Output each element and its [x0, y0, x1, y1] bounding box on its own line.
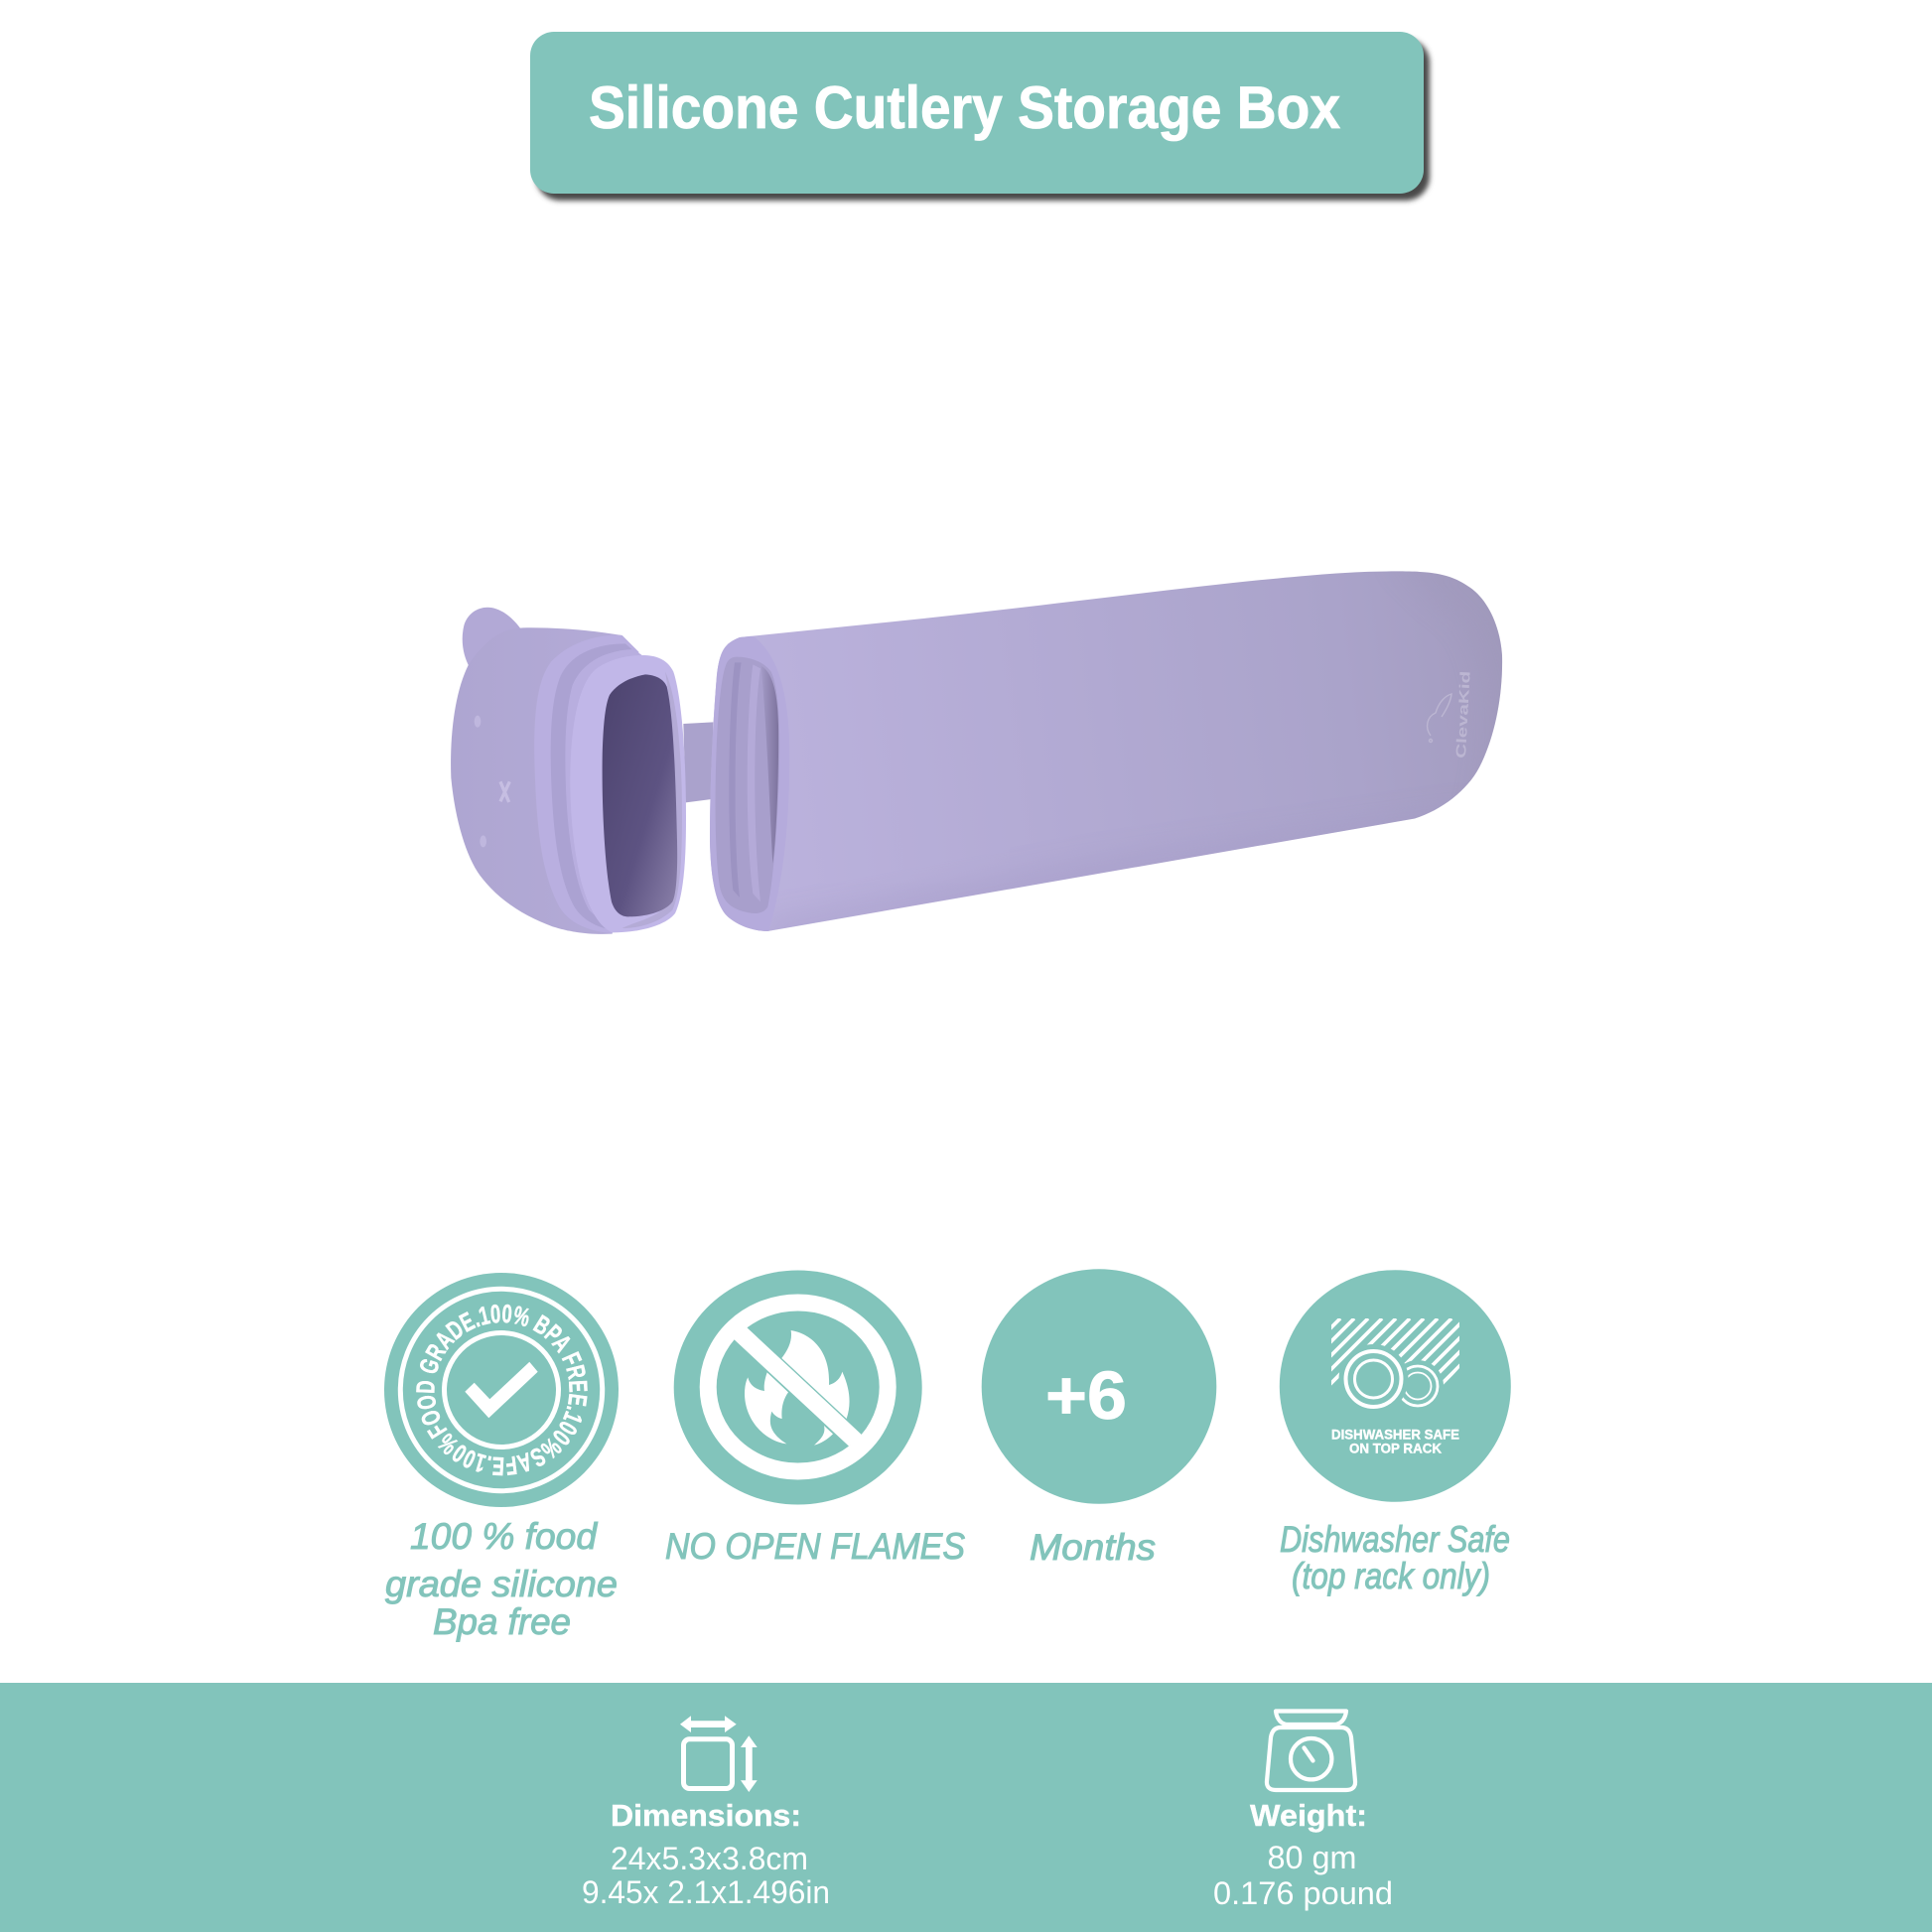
label: food grade: Bpa free: [433, 1601, 571, 1642]
icon: dimensions: [680, 1716, 758, 1792]
weight text: [1213, 1798, 1393, 1911]
cap head: [451, 627, 638, 934]
connecting strap: [683, 722, 713, 802]
bear cap: [451, 608, 686, 934]
product photo: silicone cutlery case with bear cap: [451, 556, 1529, 943]
dimensions text: [582, 1798, 830, 1910]
cap opening: [603, 674, 677, 916]
cap face details: [475, 716, 509, 847]
badge: 100% food grade: [384, 1273, 619, 1507]
badge caption: ON TOP RACK: [1349, 1442, 1442, 1455]
icon: kitchen scale: [1267, 1712, 1355, 1790]
badge: dishwasher safe: [1271, 1270, 1521, 1502]
brand logo on case: [1428, 670, 1473, 759]
inner rim: [570, 655, 686, 932]
title text: Silicone Cutlery Storage Box: [589, 74, 1340, 141]
label: dishwasher safe: (top rack only): [1292, 1556, 1490, 1596]
icon: flame with prohibition slash: [732, 1325, 865, 1447]
dimensions text: 24x5.3x3.8cm: [611, 1841, 808, 1876]
label: months: Months: [1030, 1527, 1156, 1568]
case body: [710, 571, 1503, 931]
badge caption: DISHWASHER SAFE: [1331, 1428, 1459, 1442]
badge: no open flames: [674, 1271, 922, 1505]
age number: +6: [1045, 1357, 1127, 1434]
label: no open flames: NO OPEN FLAMES: [665, 1526, 965, 1567]
footer band: [0, 1683, 1932, 1932]
brand name: ClevaKid: [1452, 670, 1473, 759]
weight text: 80 gm: [1267, 1840, 1356, 1875]
dimensions text: Dimensions:: [611, 1798, 801, 1833]
icon: check mark: [465, 1362, 538, 1418]
label: dishwasher safe: Dishwasher Safe: [1280, 1519, 1510, 1560]
weight text: Weight:: [1250, 1798, 1367, 1833]
label: food grade: [385, 1516, 618, 1642]
weight text: 0.176 pound: [1213, 1875, 1393, 1911]
title banner: [530, 32, 1430, 201]
dimensions text: 9.45x 2.1x1.496in: [582, 1874, 830, 1910]
label: dishwasher safe: [1280, 1519, 1510, 1596]
label: food grade: 100 % food: [410, 1516, 598, 1557]
circular seal text: FOOD GRADE.100% BPA FREE.100%SAFE.100%: [416, 1305, 588, 1475]
badge: +6 months: [982, 1269, 1216, 1504]
icon: rack hatch and plates: [1331, 1318, 1459, 1409]
label: food grade: grade silicone: [385, 1564, 618, 1604]
bear ear: [463, 608, 520, 667]
badge caption: [1331, 1428, 1459, 1455]
outer flange: [534, 635, 638, 933]
